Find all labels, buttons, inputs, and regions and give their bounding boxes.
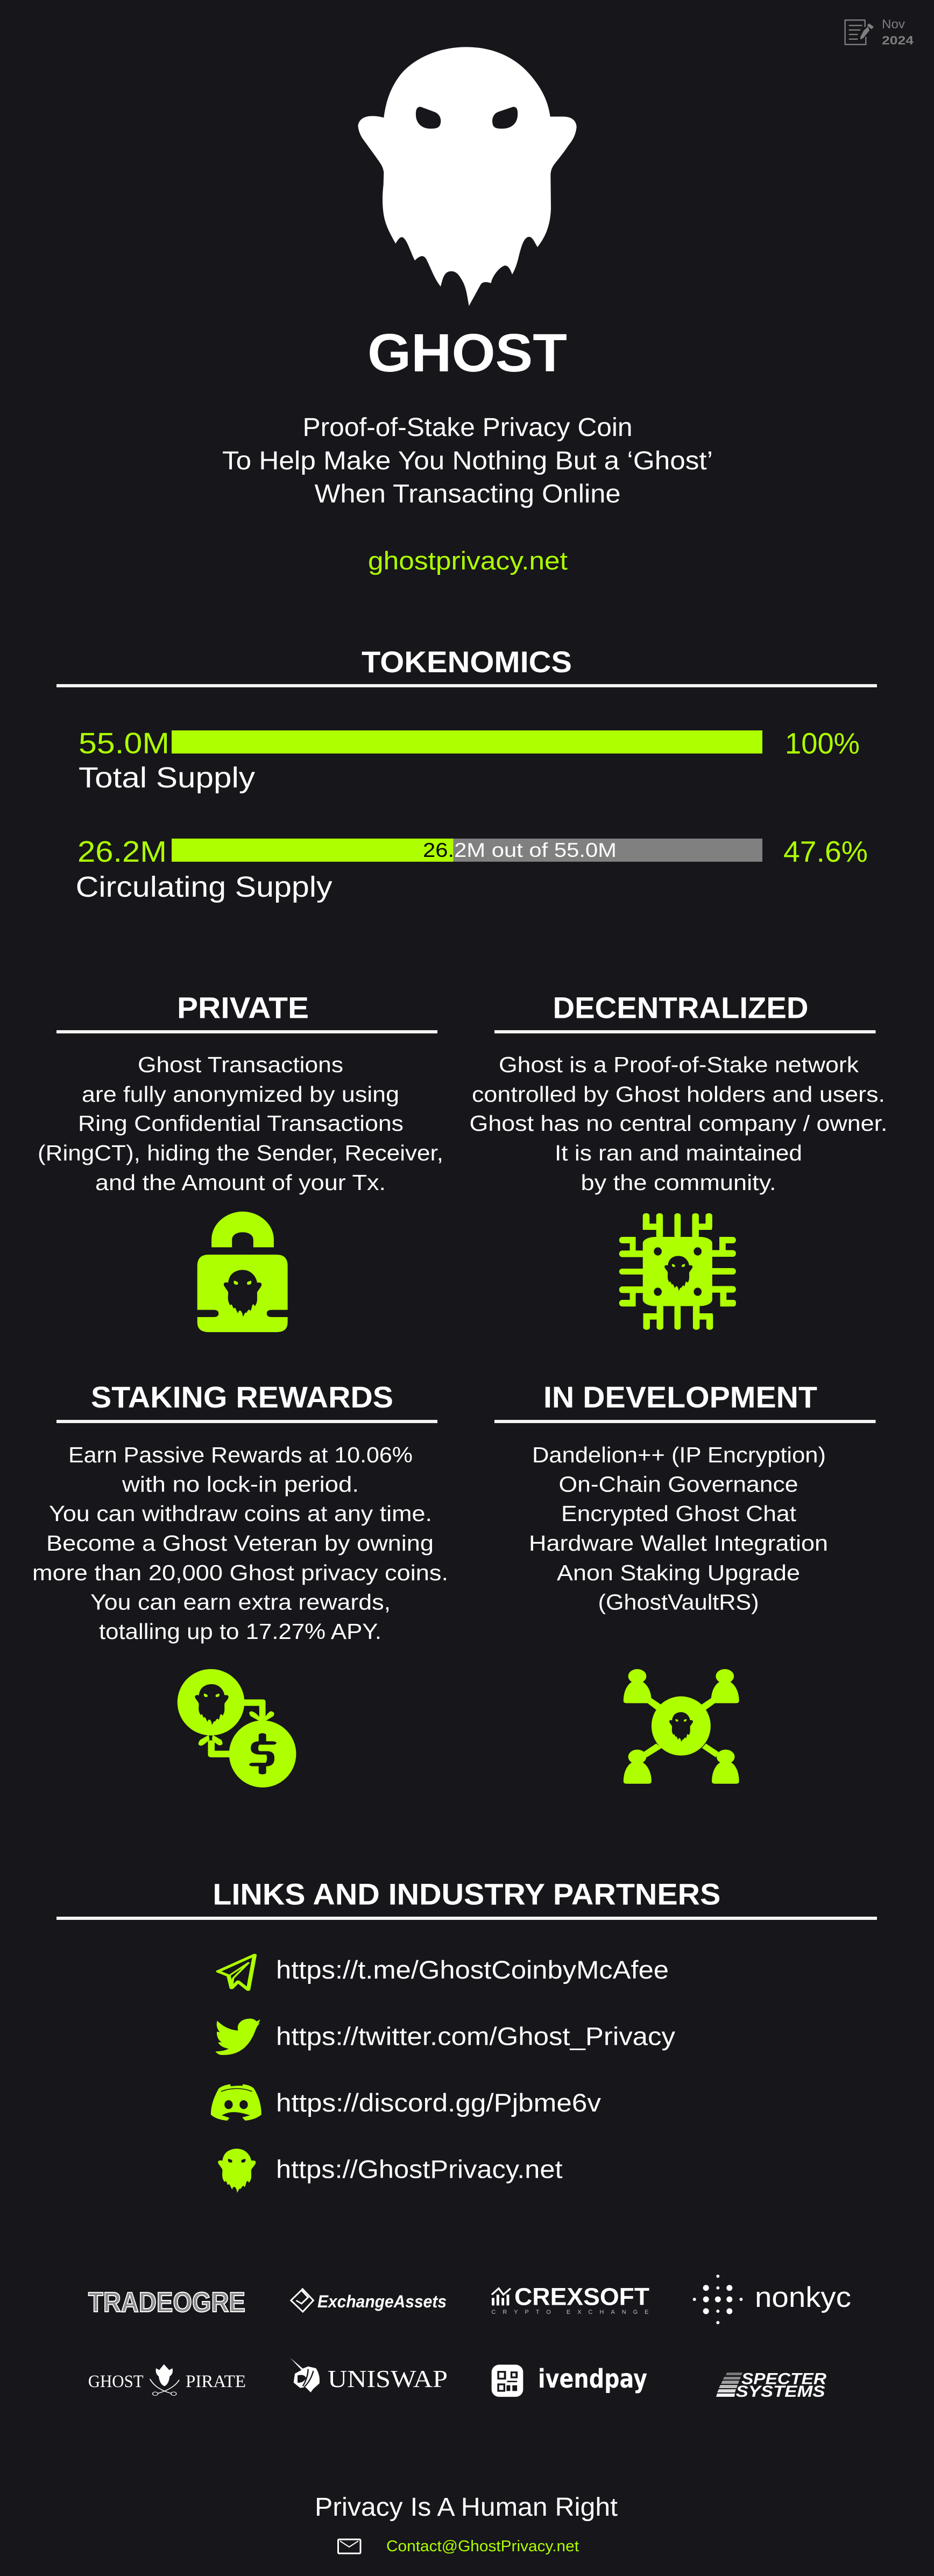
- text: private: and the Amount of your Tx.: [95, 1170, 386, 1195]
- link: twitter: https://twitter.com/Ghost_Privacy: [276, 2022, 676, 2051]
- link: telegram: https://t.me/GhostCoinbyMcAfee: [276, 1955, 669, 1984]
- text: decentralized: Ghost is a Proof-of-Stake network: [499, 1052, 859, 1077]
- bar chart: total supply: 100%: [785, 727, 860, 760]
- icon: chip with ghost: [619, 1213, 736, 1330]
- bar chart: total supply: 55.0M: [79, 727, 169, 760]
- date text: Nov: [882, 17, 905, 31]
- icon: ghost: [218, 2149, 256, 2193]
- icon: nonkyc dots: [693, 2275, 742, 2324]
- heading: tokenomics: TOKENOMICS: [362, 645, 572, 679]
- text: staking rewards: Earn Passive Rewards at 10.06%: [68, 1442, 413, 1467]
- icon: telegram: [216, 1954, 257, 1991]
- icon: discord: [211, 2084, 261, 2121]
- heading: staking rewards: STAKING REWARDS: [91, 1380, 393, 1414]
- text: in development: Encrypted Ghost Chat: [561, 1501, 797, 1526]
- logo: nonkyc: [693, 2275, 851, 2324]
- tagline: [222, 413, 713, 509]
- bar chart: circulating supply: [76, 835, 868, 903]
- icon: twitter: [215, 2018, 260, 2055]
- bar chart: total supply: Total Supply: [79, 762, 255, 794]
- icon: specter stripes: [716, 2373, 742, 2397]
- panel: in development: [494, 1380, 876, 1784]
- heading: private: PRIVATE: [177, 990, 309, 1025]
- heading: links and industry partners: [56, 1877, 877, 1920]
- text: staking rewards: [32, 1442, 448, 1644]
- heading: links and industry partners: LINKS AND INDUSTRY PARTNERS: [213, 1877, 720, 1911]
- date badge: [845, 17, 914, 47]
- icon: unicorn: [291, 2357, 320, 2392]
- icon: crexsoft chart: [491, 2287, 511, 2306]
- text: staking rewards: You can earn extra rewards,: [90, 1590, 391, 1615]
- logo: crexsoft: CRYPTO EXCHANGE: [492, 2309, 649, 2315]
- text: decentralized: Ghost has no central company / owner.: [469, 1111, 888, 1136]
- text: private: Ghost Transactions: [138, 1052, 343, 1077]
- logo: crexsoft: CREXSOFT: [514, 2283, 649, 2311]
- panel: private: [38, 990, 443, 1332]
- tagline: When Transacting Online: [315, 480, 621, 509]
- panel: links and industry partners: [56, 1877, 877, 2193]
- bar chart: circulating supply: 26.2M out of 55.0M: [423, 839, 617, 861]
- logo: tradeogre: TRADEOGRE: [88, 2287, 245, 2318]
- bar chart: total supply: [79, 727, 860, 794]
- icon: exchangeassets mark: [289, 2288, 314, 2313]
- text: in development: (GhostVaultRS): [598, 1590, 759, 1615]
- logo: ivendpay: ivendpay: [538, 2364, 647, 2394]
- link: discord: https://discord.gg/Pjbme6v: [276, 2088, 602, 2117]
- link: telegram: [218, 1955, 669, 1990]
- text: private: (RingCT), hiding the Sender, Receiver,: [38, 1141, 443, 1165]
- logo: nonkyc: nonkyc: [755, 2282, 851, 2313]
- link: website: [218, 2149, 562, 2193]
- footer slogan: Privacy Is A Human Right: [315, 2493, 618, 2522]
- text: staking rewards: with no lock-in period.: [122, 1472, 359, 1497]
- text: in development: On-Chain Governance: [558, 1472, 798, 1497]
- logo: ivendpay: [492, 2364, 647, 2397]
- text: private: Ring Confidential Transactions: [78, 1111, 404, 1136]
- text: in development: Hardware Wallet Integration: [529, 1531, 828, 1556]
- text: decentralized: [469, 1052, 888, 1195]
- link: discord: [211, 2084, 602, 2121]
- icon: ghost coin exchange: [178, 1669, 296, 1787]
- logo: ghost pirate: PIRATE: [186, 2372, 246, 2391]
- text: private: are fully anonymized by using: [82, 1082, 399, 1107]
- tagline: To Help Make You Nothing But a ‘Ghost’: [222, 447, 713, 475]
- icon: envelope: [338, 2539, 360, 2553]
- icon: ghost network: [623, 1669, 739, 1784]
- panel: tokenomics: [56, 645, 877, 903]
- logo: ghost pirate: [88, 2364, 246, 2396]
- heading: decentralized: [494, 990, 876, 1033]
- icon: document and pencil: [845, 19, 874, 45]
- logo: specter systems: SPECTER: [741, 2370, 826, 2388]
- text: private: [38, 1052, 443, 1195]
- heading: private: [56, 990, 437, 1033]
- text: decentralized: It is ran and maintained: [555, 1141, 802, 1165]
- logo: exchangeassets: ExchangeAssets: [317, 2292, 447, 2311]
- logo: specter systems: [716, 2370, 826, 2401]
- text: staking rewards: You can withdraw coins at any time.: [49, 1501, 432, 1526]
- panel: staking rewards: [32, 1380, 448, 1787]
- panel: decentralized: [469, 990, 888, 1330]
- title: GHOST: [367, 323, 567, 383]
- partner logos: [88, 2275, 851, 2401]
- tagline: Proof-of-Stake Privacy Coin: [302, 413, 633, 442]
- text: staking rewards: more than 20,000 Ghost privacy coins.: [32, 1560, 448, 1585]
- bar chart: circulating supply: 26.2M: [77, 835, 167, 868]
- bar chart: circulating supply: Circulating Supply: [76, 871, 332, 903]
- website link: ghostprivacy.net: [368, 546, 568, 575]
- link: twitter: [215, 2018, 676, 2055]
- link: website: https://GhostPrivacy.net: [276, 2155, 563, 2184]
- heading: tokenomics: [56, 645, 877, 687]
- date text: [882, 17, 914, 47]
- heading: in development: IN DEVELOPMENT: [543, 1380, 817, 1414]
- icon: ivendpay qr: [492, 2364, 523, 2397]
- icon: pirate and swords: [150, 2364, 180, 2396]
- logo: uniswap: [290, 2358, 448, 2392]
- logo: ghost pirate: GHOST: [88, 2372, 144, 2391]
- footer contact: Contact@GhostPrivacy.net: [386, 2538, 579, 2555]
- icon: padlock with ghost: [197, 1212, 288, 1332]
- text: staking rewards: Become a Ghost Veteran by owning: [46, 1531, 434, 1556]
- icon: ghost logo: [358, 47, 577, 306]
- heading: decentralized: DECENTRALIZED: [553, 990, 808, 1025]
- bar chart: circulating supply: 47.6%: [783, 835, 868, 868]
- logo: specter systems: SYSTEMS: [736, 2383, 825, 2401]
- heading: staking rewards: [56, 1380, 437, 1423]
- text: in development: Anon Staking Upgrade: [557, 1560, 800, 1585]
- text: decentralized: by the community.: [581, 1170, 776, 1195]
- text: staking rewards: totalling up to 17.27% APY.: [99, 1619, 381, 1644]
- date text: 2024: [882, 34, 914, 47]
- logo: uniswap: UNISWAP: [328, 2365, 448, 2392]
- heading: in development: [494, 1380, 876, 1423]
- text: decentralized: controlled by Ghost holders and users.: [472, 1082, 885, 1107]
- text: in development: [529, 1442, 828, 1615]
- text: in development: Dandelion++ (IP Encryption): [532, 1442, 826, 1467]
- dollar sign: [253, 1743, 273, 1764]
- logo: exchangeassets: [291, 2289, 447, 2312]
